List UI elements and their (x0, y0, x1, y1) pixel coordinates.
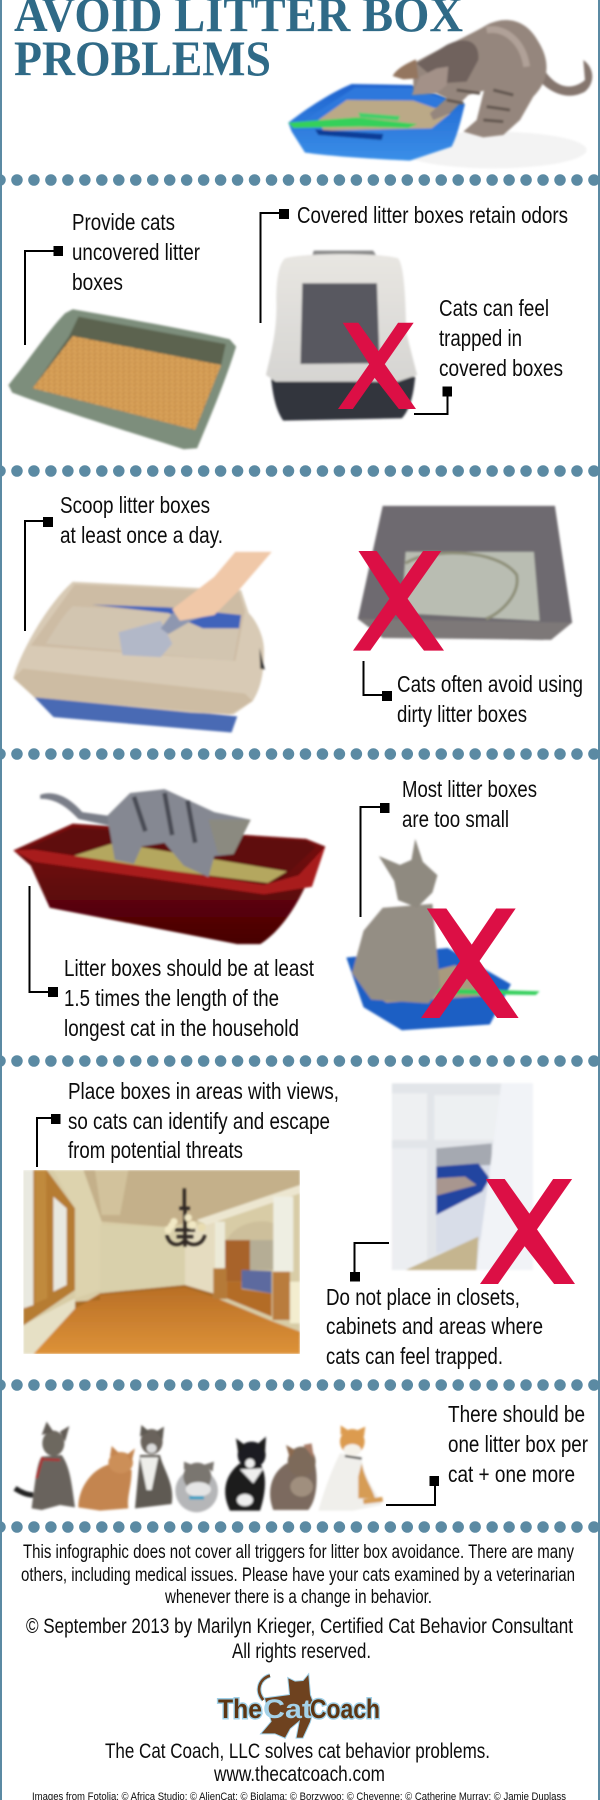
icon: dirty grey litter box (358, 506, 572, 640)
icon: blue litter box (288, 84, 465, 161)
text: disclaimer: whenever there is a change in behavior. (164, 1587, 432, 1608)
text: disclaimer (21, 1542, 575, 1608)
connector: covered boxes retain odors (260, 209, 289, 323)
text: place boxes with views: so cats can identify and escape (68, 1108, 330, 1134)
text: company line and website: www.thecatcoach.com (213, 1763, 385, 1786)
text: cats avoid dirty boxes: dirty litter boxes (397, 701, 527, 727)
text: one box per cat plus one (448, 1401, 588, 1487)
text: cats can feel trapped: Cats can feel (439, 295, 549, 321)
text: cats can feel trapped: covered boxes (439, 355, 563, 381)
text: provide uncovered boxes: uncovered litter (72, 239, 200, 265)
logo: The Cat Coach: Coach (310, 1694, 380, 1724)
icon: red X on covered box (338, 323, 416, 409)
icon: black and white cat (225, 1437, 266, 1511)
icon: grey kitten (393, 20, 592, 137)
connector: box length (30, 886, 58, 997)
connector: cats avoid dirty boxes (364, 661, 392, 701)
connector: do not place in closets (350, 1243, 389, 1282)
text: company line and website: The Cat Coach, LLC solves cat behavior problems. (105, 1740, 490, 1763)
icon: tortoiseshell cat (270, 1443, 317, 1510)
text: most boxes too small: are too small (402, 806, 509, 832)
icon: kitten in small blue box (346, 839, 540, 1030)
icon: red X on dirty box (353, 551, 444, 651)
connector: most boxes too small (360, 803, 390, 917)
panel: box size (13, 776, 540, 1041)
text: scoop daily: at least once a day. (60, 522, 223, 548)
icon: tabby cat with red collar (15, 1422, 75, 1510)
text: scoop daily (60, 492, 223, 548)
text: company line and website (105, 1740, 490, 1786)
text: most boxes too small: Most litter boxes (402, 776, 537, 802)
text: do not place in closets: cats can feel trapped. (326, 1343, 503, 1369)
text: scoop daily: Scoop litter boxes (60, 492, 210, 518)
icon: orange cat (78, 1446, 135, 1511)
text: place boxes with views: Place boxes in areas with views, (68, 1078, 339, 1104)
logo: The Cat Coach: Cat (263, 1694, 312, 1724)
icon: red litter box with tabby cat (13, 789, 325, 944)
text: cats can feel trapped (439, 295, 563, 381)
text: box length: Litter boxes should be at least (64, 955, 314, 981)
icon: chandelier (165, 1188, 206, 1247)
icon: red X on cabinet (480, 1179, 575, 1284)
connector: one box per cat (386, 1476, 439, 1505)
image: litter box inside cabinet (392, 1083, 533, 1270)
panel: scooping (13, 492, 583, 732)
text: provide uncovered boxes (72, 209, 200, 295)
text: provide uncovered boxes: boxes (72, 269, 123, 295)
icon: white and orange cat (318, 1425, 383, 1511)
dotted section dividers (0, 180, 600, 1527)
image: row of seven cats (15, 1422, 383, 1512)
text: copyright: All rights reserved. (232, 1640, 371, 1663)
logo: The Cat Coach (218, 1675, 380, 1738)
icon: floor reflection (400, 132, 587, 168)
title: PROBLEMS (14, 30, 271, 86)
connector: provide uncovered boxes (25, 246, 63, 345)
panel: placement (23, 1078, 575, 1369)
text: place boxes with views: from potential threats (68, 1137, 243, 1163)
text: box length (64, 955, 314, 1041)
text: box length: longest cat in the household (64, 1015, 299, 1041)
image: open room with wood floor (23, 1170, 300, 1354)
icon: red X on small box (421, 908, 519, 1018)
text: cats can feel trapped: trapped in (439, 325, 522, 351)
text: box length: 1.5 times the length of the (64, 985, 279, 1011)
icon: green uncovered litter box (8, 309, 236, 449)
connector: cats can feel trapped (414, 386, 452, 414)
logo: The Cat Coach: The (218, 1694, 262, 1724)
text: cats avoid dirty boxes (397, 671, 583, 727)
connector: place boxes with views (37, 1114, 60, 1167)
icon: beige litter box with scoop and hand (13, 552, 272, 732)
text: do not place in closets: Do not place in closets, (326, 1284, 520, 1310)
text: do not place in closets: cabinets and areas where (326, 1313, 543, 1339)
panel: uncovered and covered boxes (8, 202, 568, 449)
text: copyright (26, 1615, 573, 1663)
icon: tabby cat with white chest (135, 1425, 172, 1508)
text: most boxes too small (402, 776, 537, 832)
connector: scoop daily (25, 517, 53, 631)
icon: grey and white cat (175, 1462, 218, 1512)
icon: covered litter box (266, 251, 417, 421)
panel: number of boxes (15, 1401, 588, 1512)
text: do not place in closets (326, 1284, 543, 1369)
title (14, 0, 463, 86)
text: provide uncovered boxes: Provide cats (72, 209, 175, 235)
text: place boxes with views (68, 1078, 339, 1163)
hero illustration: kitten at blue litter box (288, 20, 592, 168)
